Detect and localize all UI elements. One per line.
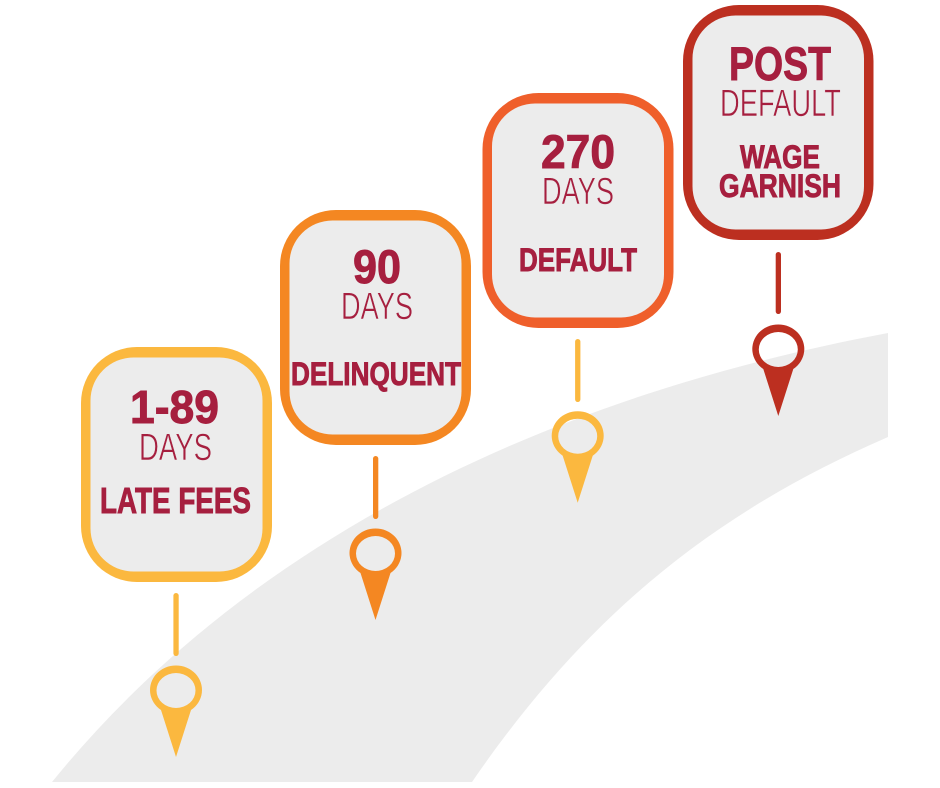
connector line xyxy=(575,339,580,402)
curved grey road xyxy=(52,333,888,782)
icon: map pin xyxy=(350,528,402,620)
number: 90: 90 xyxy=(353,240,401,293)
number: 1-89: 1-89 xyxy=(130,381,219,433)
icon: map pin xyxy=(150,665,202,757)
icon: map pin xyxy=(552,411,604,503)
status: wage garnish xyxy=(719,139,841,204)
step 3: 270 days xyxy=(482,93,674,503)
heading: post: POST xyxy=(729,37,831,90)
step 2: 90 days xyxy=(280,210,471,620)
card: delinquent xyxy=(280,210,471,445)
step 4: post default xyxy=(683,5,874,416)
status: delinquent: DELINQUENT xyxy=(291,356,461,392)
status: wage garnish: WAGE xyxy=(740,139,820,175)
card: wage garnish xyxy=(683,5,874,240)
icon: map pin xyxy=(752,324,804,416)
card: default xyxy=(482,93,674,328)
unit: days: DAYS xyxy=(139,427,212,469)
unit: days: DAYS xyxy=(341,286,413,328)
number: 270: 270 xyxy=(541,125,615,178)
card: late fees xyxy=(81,347,272,582)
connector line xyxy=(373,456,378,519)
connector line xyxy=(173,593,179,656)
subheading: default: DEFAULT xyxy=(720,83,841,125)
status: wage garnish: GARNISH xyxy=(719,168,841,204)
step 1: 1-89 days xyxy=(81,347,272,757)
status: default: DEFAULT xyxy=(519,242,637,278)
unit: days: DAYS xyxy=(542,171,614,213)
status: late fees: LATE FEES xyxy=(100,480,251,521)
connector line xyxy=(776,252,781,314)
